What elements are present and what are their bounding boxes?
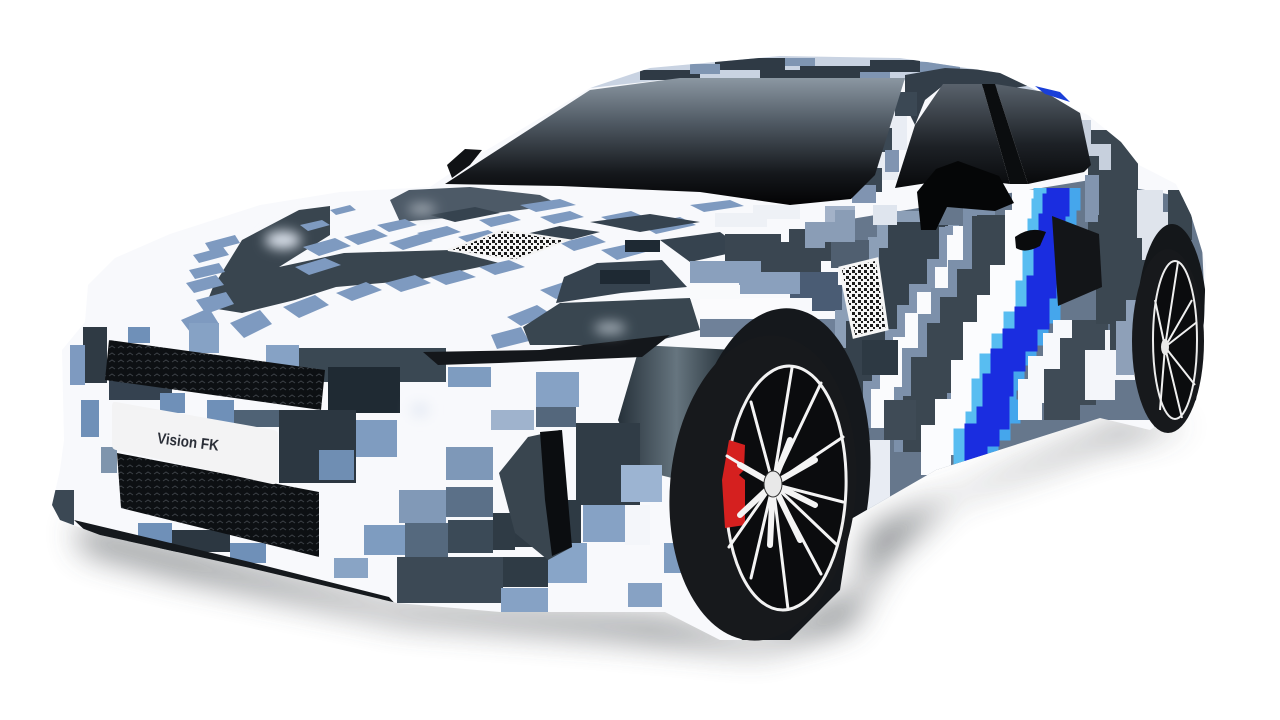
hood highlights: [265, 204, 626, 418]
fender top dark: [523, 298, 700, 345]
window pillar: [982, 84, 1028, 184]
front wheel arch: [715, 308, 871, 640]
stripe: front door dark: [866, 225, 921, 400]
pixel camouflage pattern: [50, 54, 1210, 654]
door handle: [1015, 230, 1046, 251]
side stripes: [815, 120, 1180, 515]
stripe: deep blue: [976, 188, 1058, 472]
hood upper centre dark: [390, 187, 560, 222]
car body base: [52, 56, 1206, 640]
stripe: blue light right: [993, 188, 1075, 465]
front tyre: [657, 327, 869, 649]
side window front: [895, 84, 1010, 188]
roof camouflage: [590, 54, 1060, 203]
front wheel: [657, 327, 869, 649]
stripe: lower white: [1100, 330, 1120, 400]
rear hub: [1161, 339, 1169, 355]
hood right stepped bands: [690, 212, 855, 328]
side QR code: [840, 259, 887, 337]
front spokes: [727, 368, 843, 609]
front door lower dark: [884, 400, 903, 440]
front lip: [74, 520, 397, 606]
stripe: centre dark: [921, 215, 995, 452]
roof blue accent: [1035, 86, 1070, 102]
right mirror: [917, 161, 1014, 230]
stripe: centre white: [936, 190, 1027, 475]
hood QR code: [448, 230, 568, 260]
side vent: [1052, 216, 1102, 306]
stripe: blue light left: [960, 188, 1040, 472]
rear tyre: [1132, 249, 1204, 433]
windshield: [445, 78, 905, 205]
fender dark panel: [618, 346, 724, 478]
bumper blocks: [50, 323, 687, 612]
front rim: [722, 364, 850, 612]
stripe: rear door dark: [1062, 320, 1090, 420]
rear quarter dark: [1113, 130, 1135, 350]
stripe: front door white: [884, 226, 966, 428]
stripe: right of blue white: [1030, 320, 1065, 420]
hood dark band: [205, 206, 499, 313]
front hub: [764, 471, 782, 497]
rear spokes: [1155, 262, 1197, 418]
side window rear: [995, 84, 1091, 184]
headlight: [423, 335, 670, 365]
side base tone: [845, 180, 1210, 520]
left mirror: [447, 149, 482, 178]
rear wheel: [1132, 249, 1204, 433]
hood right dark patches: [430, 207, 745, 303]
ground shadow: [75, 425, 1190, 650]
lower grille: [117, 453, 319, 557]
number plate: [112, 402, 278, 484]
rear wheel arch: [1140, 224, 1206, 427]
plate text: Vision FK: [156, 430, 220, 455]
brake caliper: [722, 440, 745, 528]
air intake: [499, 430, 572, 560]
illustration: camouflaged Vision FK car: [52, 56, 1206, 671]
front door top stripes: [831, 240, 869, 268]
hood blue grey blocks: [181, 199, 744, 349]
front grille: [105, 340, 325, 410]
rear rim: [1153, 261, 1197, 419]
